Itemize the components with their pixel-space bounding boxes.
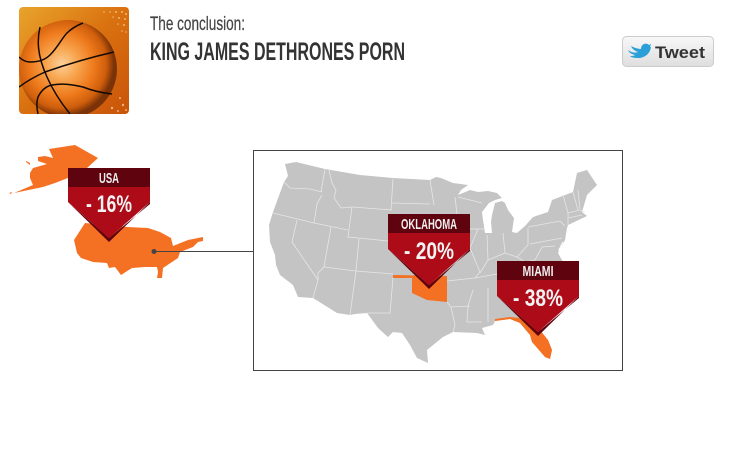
heading: King James dethrones porn: KING JAMES DETHRONES PORN [150, 38, 405, 66]
label: USA: USA [99, 170, 119, 187]
state: Florida [495, 317, 552, 359]
state: Oklahoma [393, 275, 447, 302]
button: Tweet [622, 36, 714, 66]
state borders [273, 169, 585, 332]
shape: contiguous states [74, 223, 203, 278]
icon: basketball thumbnail [19, 7, 129, 118]
badge: USA -16% [68, 168, 150, 242]
value: -38%: - 38% [513, 285, 563, 312]
label: MIAMI: MIAMI [522, 263, 554, 280]
icon: twitter bird [628, 44, 651, 58]
label: OKLAHOMA: OKLAHOMA [401, 216, 457, 233]
bay and sound details [559, 224, 577, 258]
label: Tweet: Tweet [655, 44, 706, 62]
heading: The conclusion: The conclusion: [150, 13, 245, 35]
value: -16%: - 16% [86, 191, 132, 218]
map: USA overview silhouette [9, 145, 203, 278]
shape: Alaska [14, 145, 98, 193]
badge: Miami -38% [497, 261, 579, 336]
map: contiguous United States [269, 162, 597, 363]
value: -20%: - 20% [404, 238, 454, 265]
panel: USA detail map frame [254, 150, 622, 370]
connector line [152, 249, 253, 254]
badge: Oklahoma -20% [388, 214, 470, 289]
